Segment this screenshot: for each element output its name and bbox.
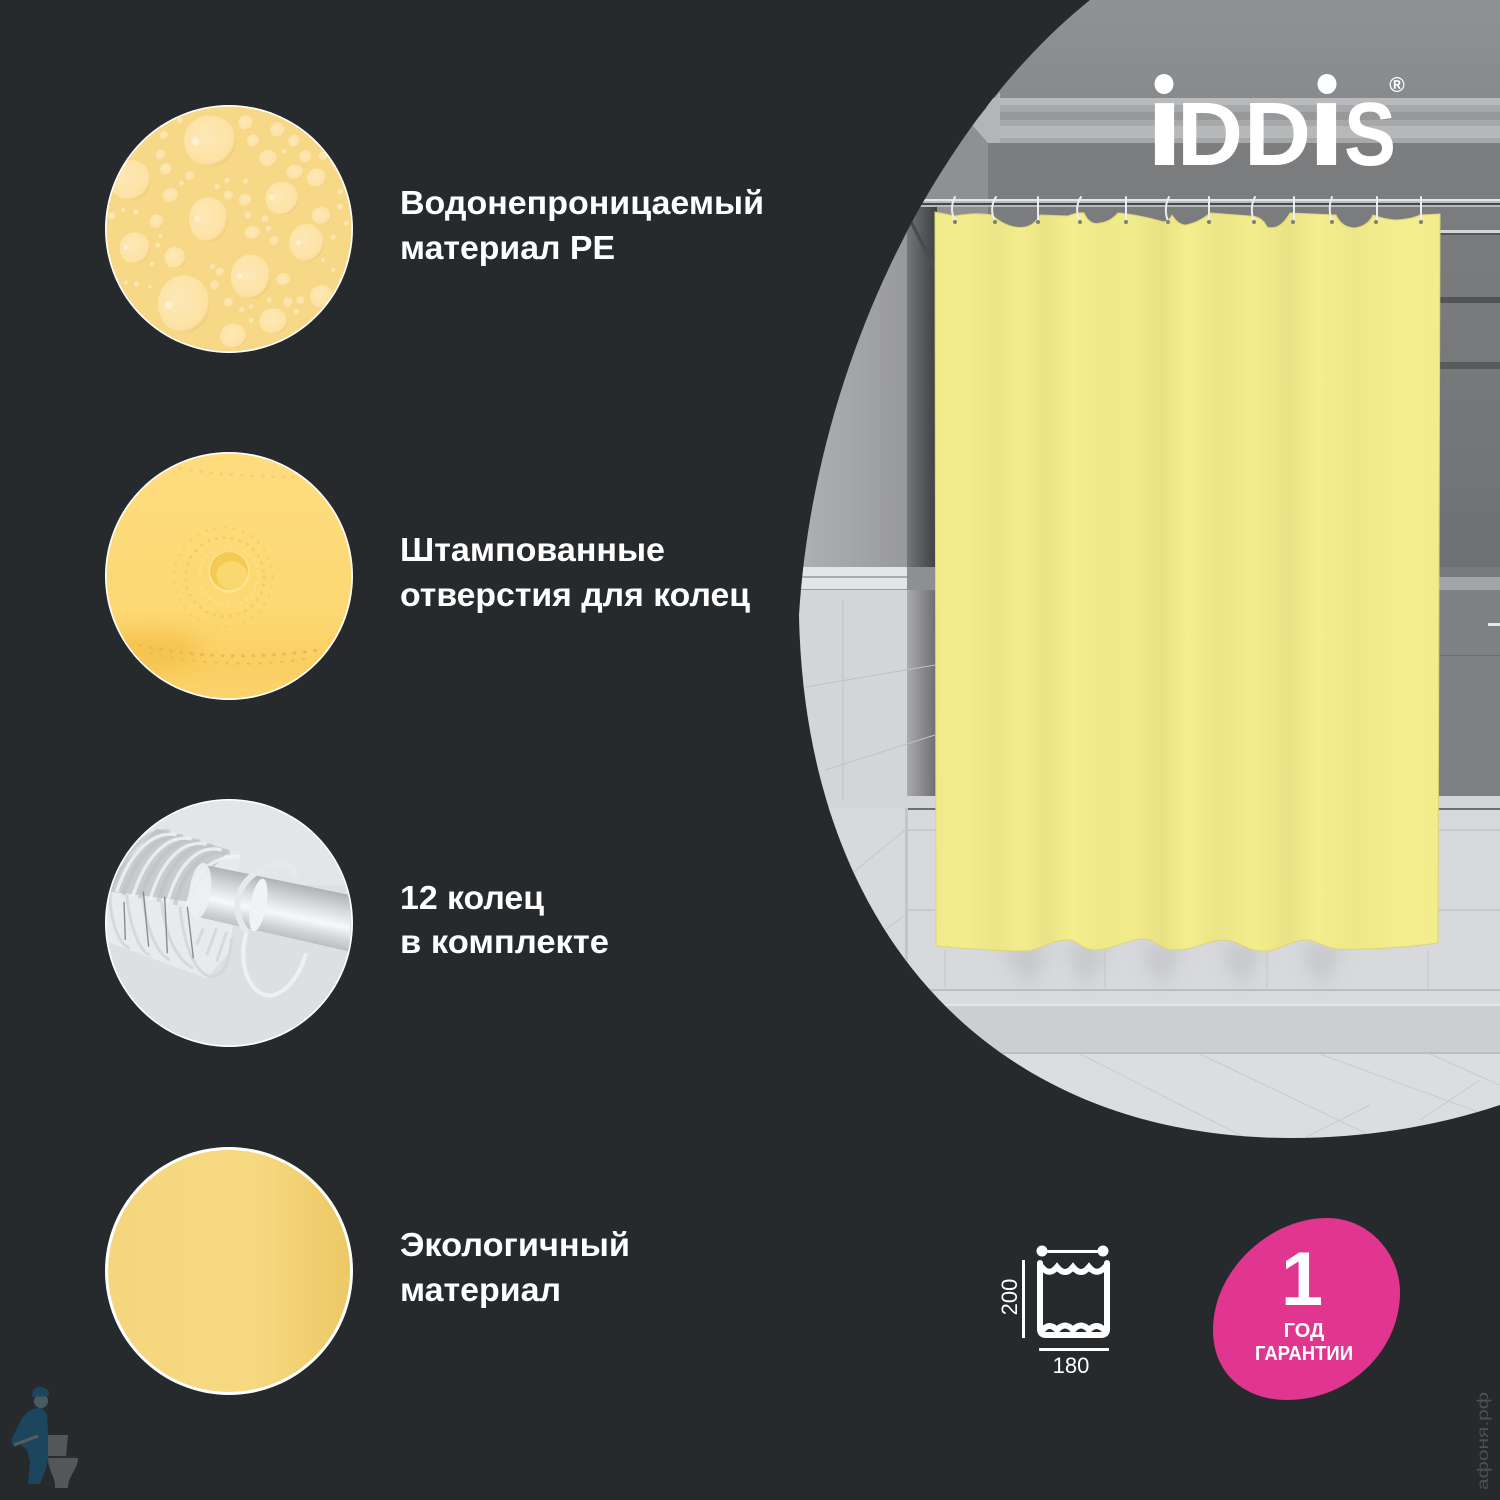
pink blob	[1213, 1218, 1400, 1400]
curtain rod	[915, 199, 1500, 235]
swatch: water drops	[105, 105, 353, 353]
feature text: материал PE	[400, 229, 615, 266]
curtain rings	[952, 197, 1421, 221]
shadow under curtain	[1007, 944, 1338, 980]
shelf/handle	[1488, 623, 1500, 626]
tile lines	[806, 600, 935, 800]
lower wall left	[790, 590, 907, 815]
warranty label	[1255, 1320, 1353, 1365]
feature text	[400, 531, 750, 613]
curtain	[935, 212, 1440, 951]
wall behind rod	[986, 143, 1500, 573]
swatch: stamped hole	[105, 452, 353, 700]
wainscot band	[790, 567, 1500, 591]
feature: eco material	[105, 1147, 630, 1395]
watermark: site name: афоня.рф	[1475, 1392, 1492, 1490]
feature: stamped holes	[105, 452, 750, 700]
warranty label: ГОД	[1284, 1320, 1324, 1342]
feature text: Штампованные	[400, 531, 665, 568]
size icon	[997, 1246, 1109, 1378]
curtain pictogram	[1036, 1246, 1108, 1335]
warranty badge	[1213, 1218, 1400, 1400]
wall dark bands on right	[1440, 297, 1500, 369]
warranty number: 1	[1281, 1237, 1323, 1322]
bathroom photo panel	[790, 0, 1500, 1143]
feature text: Экологичный	[400, 1226, 630, 1263]
height line	[1022, 1260, 1025, 1338]
warranty label: ГАРАНТИИ	[1255, 1343, 1353, 1365]
feature: 12 rings	[105, 799, 608, 1047]
floor	[1000, 1052, 1500, 1138]
height value: 200	[997, 1279, 1022, 1315]
registered mark: ®	[1389, 74, 1405, 97]
feature text: в комплекте	[400, 923, 609, 960]
feature text	[400, 1226, 630, 1308]
feature text: материал	[400, 1271, 561, 1308]
upper wall	[905, 0, 1500, 235]
IDDIS logo	[1146, 74, 1405, 185]
feature text	[400, 184, 764, 266]
feature: waterproof	[105, 105, 762, 353]
lower wall right	[1438, 590, 1500, 796]
feature text	[400, 879, 609, 960]
tub and lower tiles	[790, 796, 1500, 1053]
logo letter I: I	[1146, 85, 1183, 185]
left wall	[803, 232, 907, 570]
logo letter S: S	[1344, 85, 1396, 185]
ring holes	[953, 220, 1423, 224]
wall corner strip	[907, 205, 937, 570]
logo letter D: D	[1177, 85, 1243, 185]
feature text: Водонепроницаемый	[400, 184, 764, 221]
logo letter I: I	[1308, 85, 1345, 185]
swatch: fabric	[105, 1147, 353, 1395]
watermark: plumber mascot	[11, 1387, 79, 1488]
crown molding	[972, 92, 1500, 143]
feature text: отверстия для колец	[400, 576, 750, 613]
width line	[1039, 1348, 1109, 1351]
logo dots	[1154, 74, 1336, 94]
feature text: 12 колец	[400, 879, 544, 916]
width value: 180	[1053, 1353, 1089, 1378]
swatch: rings on rod	[105, 799, 353, 1047]
logo letter D: D	[1244, 85, 1311, 185]
